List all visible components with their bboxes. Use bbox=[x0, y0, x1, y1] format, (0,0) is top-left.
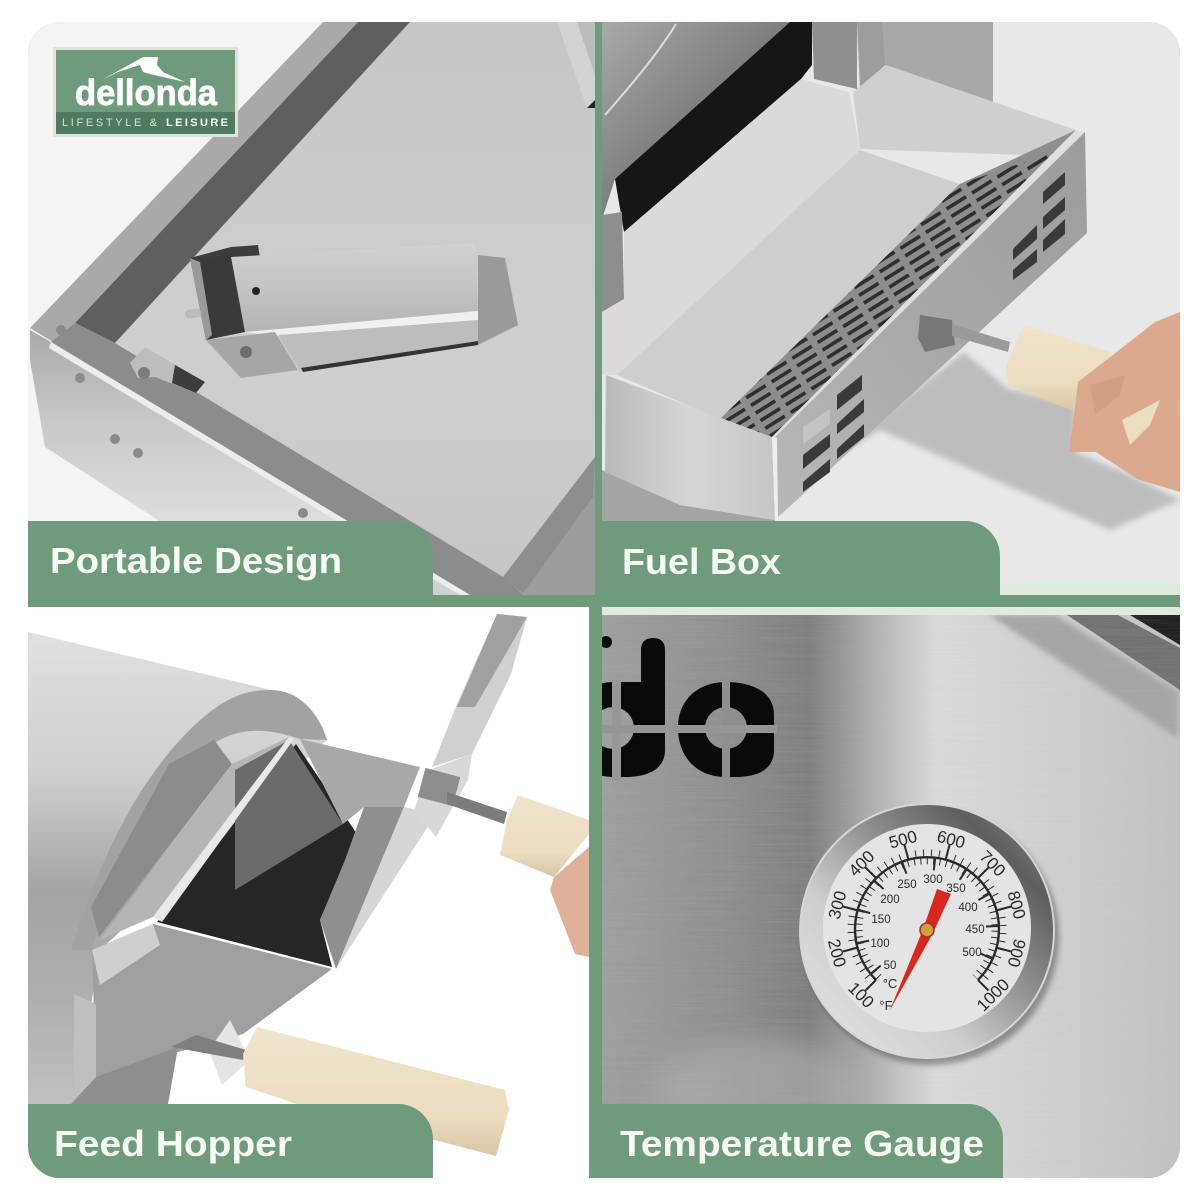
label: fuel box: Fuel Box bbox=[622, 541, 781, 582]
fahrenheit labels: 900 bbox=[1003, 937, 1029, 969]
panel: feed hopper photo bbox=[28, 607, 589, 1178]
label: temperature gauge: Temperature Gauge bbox=[620, 1123, 984, 1164]
fahrenheit labels: 100 bbox=[844, 978, 878, 1012]
scale arc bbox=[855, 857, 999, 980]
temperature gauge bbox=[800, 804, 1059, 1065]
label: portable design bbox=[28, 521, 433, 595]
label: portable design: Portable Design bbox=[50, 540, 342, 581]
fahrenheit labels: 800 bbox=[1003, 889, 1029, 921]
logo: dellonda: LEISURE bbox=[166, 117, 228, 129]
celsius labels: 250 bbox=[897, 879, 917, 891]
light strip under fuel box photo bbox=[1000, 583, 1180, 595]
fahrenheit labels: 300 bbox=[825, 889, 851, 921]
panel: portable design photo bbox=[28, 22, 595, 595]
celsius labels: °F bbox=[879, 998, 893, 1013]
fahrenheit labels: 500 bbox=[887, 827, 919, 853]
logo cut-out letters bbox=[602, 636, 777, 778]
label: feed hopper: Feed Hopper bbox=[54, 1123, 292, 1164]
fahrenheit labels: 700 bbox=[976, 847, 1009, 880]
celsius labels: 50 bbox=[884, 960, 896, 972]
logo: dellonda bbox=[53, 47, 238, 137]
celsius labels: °C bbox=[883, 976, 897, 991]
panel: temperature gauge photo bbox=[568, 615, 1180, 1178]
logo: dellonda: dellonda bbox=[75, 72, 218, 113]
label: feed hopper bbox=[28, 1104, 433, 1178]
fuel box handle and hand bbox=[918, 312, 1180, 492]
small hinge bracket bbox=[130, 347, 205, 393]
celsius labels: 400 bbox=[958, 902, 978, 914]
logo wave bbox=[102, 57, 185, 82]
light strip above gauge photo bbox=[602, 607, 1180, 615]
fahrenheit labels: 1000 bbox=[973, 975, 1013, 1015]
celsius labels: 300 bbox=[923, 874, 943, 886]
celsius labels: 350 bbox=[946, 883, 966, 895]
celsius labels: 500 bbox=[962, 947, 982, 959]
celsius labels: 450 bbox=[965, 924, 985, 936]
hopper block on sheet bbox=[185, 243, 518, 378]
celsius labels: 100 bbox=[870, 938, 890, 950]
logo: dellonda: LIFESTYLE & bbox=[62, 117, 158, 129]
hopper funnel bbox=[71, 614, 527, 1104]
fahrenheit labels: 400 bbox=[845, 847, 878, 880]
fahrenheit labels: 200 bbox=[824, 937, 850, 969]
panel: fuel box photo bbox=[602, 22, 1180, 583]
gauge needle bbox=[890, 889, 951, 1010]
celsius labels bbox=[870, 874, 985, 1013]
celsius labels: 200 bbox=[880, 894, 900, 906]
tray vent slots bbox=[803, 172, 1065, 492]
label: temperature gauge bbox=[589, 1104, 1003, 1178]
fahrenheit labels bbox=[824, 827, 1029, 1015]
fahrenheit labels: 600 bbox=[935, 827, 967, 853]
label: fuel box bbox=[602, 521, 1000, 583]
hopper handles and hand bbox=[171, 768, 589, 1156]
celsius labels: 150 bbox=[871, 914, 891, 926]
